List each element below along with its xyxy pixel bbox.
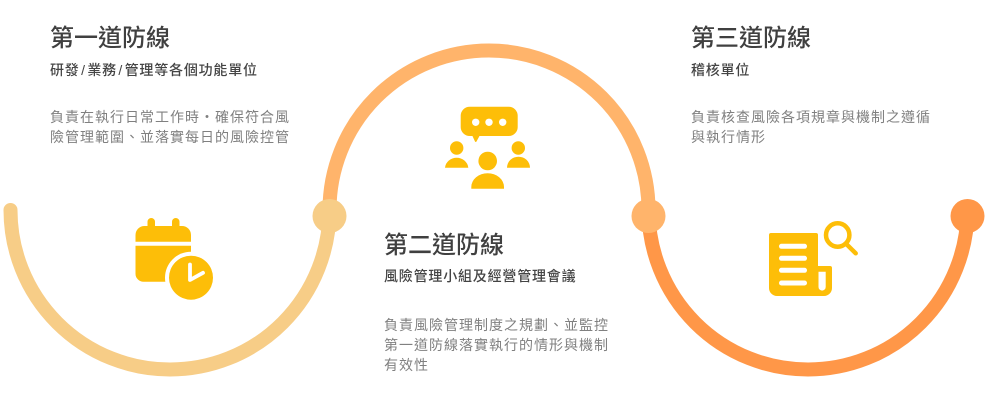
body: second line: 有效性 [384,357,429,373]
text block: second line of defence [384,232,609,373]
node: second to third junction [632,199,666,233]
text block: first line of defence [50,25,290,145]
subheading: second line: 風險管理小組及經營管理會議 [384,268,576,284]
heading: first line: 第一道防線 [50,25,170,52]
node: third line end [950,199,984,233]
icon: document with magnifier [769,223,856,296]
arc: third line [648,210,968,370]
arc: first line [10,210,330,370]
body: third line: 與執行情形 [691,129,766,145]
heading: second line: 第二道防線 [384,232,504,259]
body: first line: 負責在執行日常工作時・確保符合風 [50,109,290,125]
subheading: third line: 稽核單位 [691,62,750,78]
text block: third line of defence [691,25,931,145]
body: third line: 負責核查風險各項規章與機制之遵循 [691,109,931,125]
node: first to second junction [312,199,346,233]
icon: people in discussion [445,107,530,189]
body: second line: 負責風險管理制度之規劃、並監控 [384,317,609,333]
arc: second line [330,50,648,216]
heading: third line: 第三道防線 [691,25,811,52]
body: second line: 第一道防線落實執行的情形與機制 [384,337,609,353]
icon: calendar with clock [136,218,217,304]
body: first line: 險管理範圍、並落實每日的風險控管 [50,129,290,145]
subheading: first line: 研發/業務/管理等各個功能單位 [50,62,258,78]
